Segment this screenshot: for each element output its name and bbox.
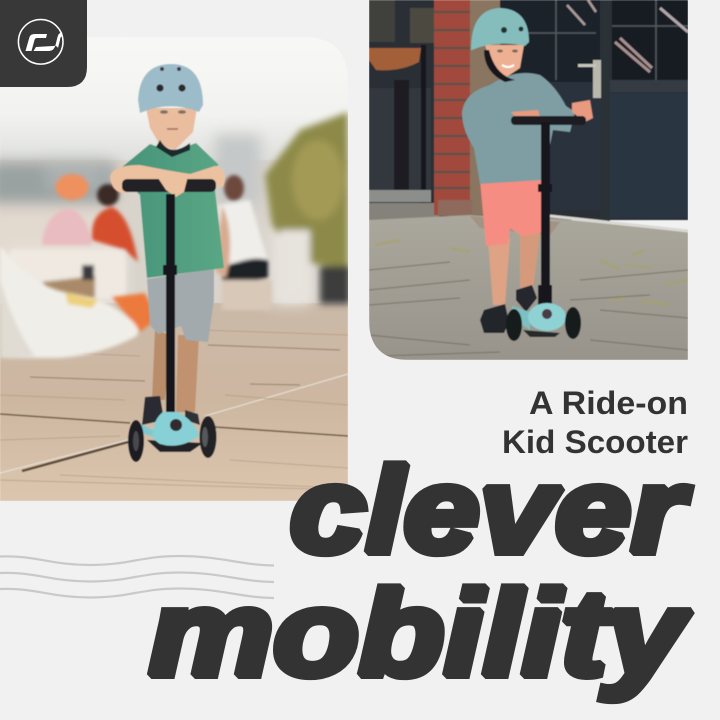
brick column: [434, 0, 500, 216]
photo: boy with scooter on wooden deck: [0, 37, 350, 501]
child: coral shorts: [480, 178, 543, 246]
left gate with hanging decoration: [369, 0, 439, 221]
dark windows: [500, 0, 688, 82]
logo badge: [0, 0, 87, 87]
decorative waves: [0, 556, 274, 598]
subtitle: [502, 385, 688, 460]
blurred plant: [265, 112, 350, 304]
scooter handlebar and pole: [511, 116, 586, 305]
boy: blue helmet: [138, 64, 203, 113]
child: legs and shoes: [480, 232, 540, 333]
scooter deck and wheels: [506, 303, 581, 341]
child: chin strap: [484, 50, 515, 82]
cobblestone ground: [369, 215, 688, 360]
blurred people: [10, 174, 272, 310]
boy: legs and shoes: [142, 330, 200, 425]
beanbag and cushion: [0, 245, 158, 358]
child: grey-blue sweater: [462, 73, 575, 184]
subtitle: Kid Scooter: [502, 424, 688, 460]
child: hands: [511, 100, 593, 124]
photo: smiling child with scooter by brick wall: [369, 0, 688, 360]
subtitle: A Ride-on: [529, 385, 688, 421]
boy: face: [146, 108, 197, 157]
boy: denim shorts: [147, 269, 214, 342]
boy: arms: [110, 165, 225, 194]
headline: clever mobility: [149, 442, 692, 701]
scooter handlebar and pole: [122, 176, 216, 412]
child: face: [485, 45, 524, 78]
icon: circular brand logo: [18, 20, 63, 64]
door panels: [550, 59, 688, 222]
floor: wooden deck: [0, 303, 348, 501]
headline: clever mobility: clever: [290, 442, 691, 578]
headline: clever mobility: mobility: [149, 565, 692, 701]
boy: green polo shirt: [116, 143, 224, 278]
blurred background: buildings and party scene: [0, 135, 310, 305]
scooter deck and wheels: [128, 412, 216, 462]
child: teal helmet: [471, 8, 529, 50]
